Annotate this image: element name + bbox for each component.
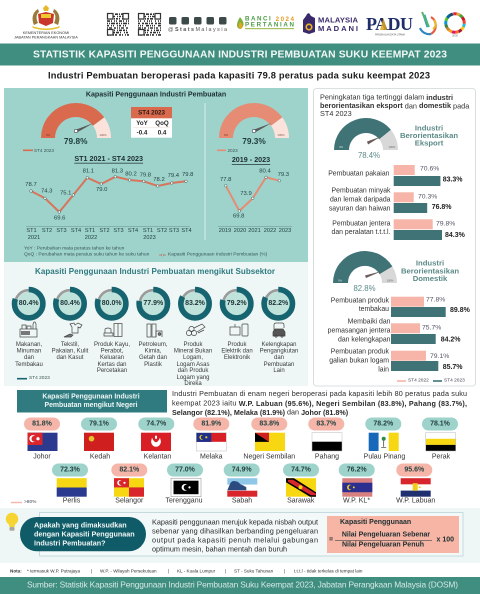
logo: Jabatan Perangkaan Malaysia coat of arms bbox=[14, 5, 78, 40]
footnotes: * termasuk W.P. Putrajaya bbox=[27, 568, 80, 574]
line chart: quarterly capacity utilisation: 74.3 bbox=[41, 189, 53, 195]
line chart: quarterly capacity utilisation: ST4 bbox=[71, 228, 81, 234]
legend: ST4 2022 and ST4 2023 bbox=[397, 378, 465, 384]
line chart: quarterly capacity utilisation: ST4 bbox=[128, 228, 138, 234]
notes and line legend: YoY : Perubahan mata peratus tahun ke tahun bbox=[24, 246, 125, 252]
flag: Perlis bbox=[57, 478, 87, 497]
gauge: ST4 2023 79.8%: 79.8% bbox=[64, 136, 88, 146]
intro text bbox=[320, 92, 470, 118]
bar chart: export oriented: 70.6% bbox=[420, 166, 439, 172]
question pill: Apakah yang dimaksudkan bbox=[34, 520, 127, 530]
state names: row two: Terengganu bbox=[166, 498, 203, 504]
subsector labels: Petroleum, bbox=[138, 342, 168, 348]
text: definition: optimum mesin, bahan mentah dan buruh bbox=[152, 544, 287, 554]
footnotes: KL - Kuala Lumpur bbox=[177, 568, 216, 574]
line chart: quarterly capacity utilisation: ST3 bbox=[113, 228, 124, 234]
line chart: annual capacity utilisation: 80.4 bbox=[259, 169, 271, 175]
footnotes: W.P. - Wilayah Persekutuan bbox=[100, 568, 157, 574]
formula box: Nilai Pengeluaran Penuh bbox=[342, 542, 424, 548]
subsector labels: Perabot, bbox=[101, 349, 124, 355]
state pills: row one: 83.8% bbox=[259, 420, 280, 428]
subsector labels: Pengangkutan bbox=[260, 349, 298, 355]
social media handle bbox=[168, 17, 227, 33]
flag: Kedah bbox=[84, 433, 114, 451]
table: YoY and QoQ: YoY bbox=[136, 120, 149, 127]
heading: export oriented industry: Berorientasikan bbox=[400, 131, 458, 140]
line chart: quarterly capacity utilisation: ST3 bbox=[56, 228, 67, 234]
text: definition bbox=[152, 518, 318, 554]
bar chart: domestic oriented: 84.2% bbox=[441, 336, 461, 344]
gauge: domestic 82.8%: 82.8% bbox=[353, 284, 376, 293]
subsector labels: Kelengkapan bbox=[261, 342, 297, 348]
state names: row one: Kedah bbox=[90, 454, 110, 460]
footnotes: ST - Suku Tahunan bbox=[234, 568, 274, 574]
icon: metal pipes bbox=[186, 324, 205, 336]
bar chart: domestic oriented: 77.8% bbox=[426, 296, 445, 304]
flag: W.P. Labuan bbox=[401, 478, 431, 497]
chart heading: quarterly: ST1 2021 - ST4 2023 bbox=[74, 154, 143, 163]
heading: export oriented industry bbox=[400, 124, 458, 148]
subsector labels: Tekstil, bbox=[61, 342, 79, 348]
footnotes: | bbox=[225, 568, 226, 574]
heading: export oriented industry: Industri bbox=[415, 124, 443, 132]
state pills: row one: 74.7% bbox=[146, 420, 167, 428]
line chart: quarterly capacity utilisation: ST2 bbox=[42, 228, 52, 234]
heading: capacity utilisation by state: Pembuatan mengikut Negeri bbox=[44, 402, 138, 409]
line chart: quarterly capacity utilisation: 78.2 bbox=[153, 177, 165, 183]
subsector labels: Percetakan bbox=[97, 368, 127, 374]
line chart: annual capacity utilisation bbox=[218, 169, 292, 234]
line chart: quarterly capacity utilisation: 80.2 bbox=[125, 171, 137, 177]
state pills: row two: 74.9% bbox=[232, 466, 252, 474]
state names: row two: Selangor bbox=[115, 498, 144, 504]
QR code 1 bbox=[107, 14, 129, 35]
line chart: quarterly capacity utilisation: 75.1 bbox=[60, 190, 71, 196]
table: YoY and QoQ: -0.4 bbox=[137, 130, 148, 136]
text: state summary: Selangor (82.1%), Melaka (81.9%) dan Johor (81.8%) bbox=[172, 408, 349, 416]
notes and line legend: Kapasiti Penggunaan Industri Pembuatan (%) bbox=[168, 252, 268, 258]
footnotes: Nota: bbox=[10, 568, 22, 574]
footnotes: | bbox=[168, 568, 169, 574]
subsector labels: dan bbox=[24, 355, 34, 361]
heading: capacity utilisation by state bbox=[17, 390, 167, 412]
social media handle: @ Stats Malaysia bbox=[168, 27, 227, 33]
flag: Sabah bbox=[227, 478, 257, 497]
legend: ST4 2023: ST4 2023 bbox=[29, 375, 50, 381]
bar chart: domestic oriented: dan kelengkapan bbox=[338, 336, 391, 344]
heading: capacity utilisation by state: Kapasiti Penggunaan Industri bbox=[42, 394, 140, 400]
donuts: subsector percentages: 80.0% bbox=[102, 300, 122, 307]
line chart: quarterly capacity utilisation: 2021 bbox=[28, 235, 40, 241]
panel: capacity utilisation by subsector bbox=[4, 262, 308, 387]
flag: Terengganu bbox=[171, 478, 201, 497]
subsector labels bbox=[15, 342, 298, 387]
intro text: Peningkatan tiga tertinggi dalam industri bbox=[320, 92, 453, 102]
bar chart: export oriented: Pembuatan pakaian bbox=[328, 170, 390, 178]
donuts: subsector percentages: 80.4% bbox=[19, 300, 39, 307]
state names: row one: Perak bbox=[432, 454, 451, 460]
legend: 2023: 2023 bbox=[228, 148, 238, 153]
bar chart: export oriented: dan peralatan t.t.t.l. bbox=[332, 229, 391, 236]
subsector labels: Elektrik dan bbox=[221, 349, 253, 355]
flag: Kelantan bbox=[141, 433, 171, 451]
logo: Banci 2024 Pertanian bbox=[237, 15, 295, 29]
logo: colourful V mark bbox=[420, 12, 436, 34]
line chart: quarterly capacity utilisation: ST3 bbox=[169, 228, 179, 234]
logo: PADU: PADU bbox=[366, 14, 413, 34]
flag: Negeri Sembilan bbox=[255, 433, 285, 451]
bar chart: domestic oriented: Membaiki dan bbox=[348, 318, 391, 326]
gauge: export 78.4%: 78.4% bbox=[358, 151, 380, 160]
intro text: berorientasikan eksport dan domestik pada bbox=[320, 101, 470, 110]
donuts: subsector percentages bbox=[14, 290, 292, 318]
gauge: domestic 82.8%: 100% bbox=[387, 278, 394, 282]
subtitle: Industri Pembuatan beroperasi pada kapasiti 79.8 peratus pada suku keempat 2023 bbox=[48, 70, 430, 80]
bar chart: export oriented: Pembuatan jentera bbox=[332, 220, 391, 228]
panel: manufacturing capacity utilisation bbox=[4, 88, 308, 262]
notes and line legend bbox=[24, 246, 268, 258]
state names: row two: W.P. KL* bbox=[343, 498, 370, 504]
text: state summary bbox=[172, 389, 467, 416]
state names: row two: W.P. Labuan bbox=[396, 498, 435, 504]
subsector labels: Pakaian, Kulit bbox=[52, 349, 89, 355]
question pill bbox=[20, 517, 146, 551]
logo: Malaysia Madani bbox=[303, 13, 359, 34]
bar chart: export oriented bbox=[328, 165, 466, 240]
line chart: annual capacity utilisation: 79.3 bbox=[278, 172, 290, 178]
subsector labels: Getah dan bbox=[139, 355, 167, 361]
state names: row two: Sabah bbox=[232, 498, 252, 504]
state pills: row one: 83.7% bbox=[316, 420, 337, 428]
subsector labels: Lain bbox=[273, 368, 285, 374]
gauge: export 78.4%: 100% bbox=[389, 145, 396, 149]
icon: electronics bbox=[230, 324, 248, 336]
source band: Sumber: Statistik Kapasiti Penggunaan Industri Pembuatan Suku Keempat 2023, Jabatan Perangkaan Malaysia (DOSM) bbox=[27, 580, 458, 590]
line chart: annual capacity utilisation: 73.9 bbox=[240, 191, 252, 197]
line chart: quarterly capacity utilisation: ST4 bbox=[181, 228, 192, 234]
text: state summary: Industri Pembuatan di enam negeri beroperasi pada kapasiti lebih 80 peratus pada suku bbox=[172, 389, 467, 398]
logo: SDG wheel bbox=[444, 12, 466, 38]
formula box: = bbox=[329, 536, 333, 544]
state pills: row one: 81.9% bbox=[201, 420, 222, 428]
text: state summary: keempat 2023 iaitu W.P. Labuan (95.6%), Negeri Sembilan (83.8%), Pahang (83.7%), bbox=[172, 398, 467, 407]
footnotes bbox=[10, 568, 363, 574]
legend: 2023 bbox=[217, 148, 238, 153]
state pills: row two: 76.2% bbox=[347, 466, 367, 474]
formula box: Kapasiti Penggunaan bbox=[340, 519, 411, 526]
subsector labels: dan bbox=[274, 355, 284, 361]
donuts: subsector percentages: 79.2% bbox=[227, 300, 247, 307]
line chart: annual capacity utilisation: 77.8 bbox=[220, 177, 232, 183]
subsector labels: Tembakau bbox=[15, 362, 43, 368]
text: definition: sebenar yang dihasilkan berbanding pengeluaran bbox=[152, 526, 318, 536]
bar chart: domestic oriented: 89.8% bbox=[450, 307, 471, 314]
table: YoY and QoQ: QoQ bbox=[155, 120, 169, 127]
state names: row one: Melaka bbox=[200, 454, 223, 460]
state names: row one: Kelantan bbox=[144, 454, 171, 460]
state pills: row two: 77.0% bbox=[175, 466, 196, 474]
legend: ST4 2022 and ST4 2023: ST4 2022 bbox=[408, 378, 429, 384]
gauge: 2023 79.3%: 0% bbox=[224, 133, 229, 137]
text: definition: Kapasiti penggunaan merujuk kepada nisbah output bbox=[152, 518, 318, 526]
line chart: quarterly capacity utilisation: 69.6 bbox=[54, 216, 66, 222]
panel: export and domestic oriented industries bbox=[314, 88, 476, 386]
line chart: annual capacity utilisation: 69.8 bbox=[233, 214, 245, 220]
donuts: subsector percentages: 77.9% bbox=[143, 300, 164, 307]
gauge: 2023 79.3% bbox=[219, 103, 289, 146]
subsector labels: Mineral Bukan bbox=[174, 349, 212, 355]
line chart: quarterly capacity utilisation: 81.3 bbox=[112, 169, 124, 175]
state names: row two bbox=[63, 498, 435, 504]
legend: ST4 2023 bbox=[17, 375, 50, 381]
logo: Jabatan Perangkaan Malaysia coat of arms: JABATAN PERANGKAAN MALAYSIA bbox=[14, 36, 78, 40]
state pills: row one: 79.1% bbox=[89, 420, 110, 428]
state names: row two: Perlis bbox=[63, 498, 81, 504]
flag: Johor bbox=[28, 433, 58, 451]
logo: Banci 2024 Pertanian: BANCI 2024 bbox=[245, 15, 295, 22]
flag: Selangor bbox=[114, 478, 144, 497]
state pills: row two: 72.3% bbox=[60, 466, 81, 474]
footnotes: | bbox=[284, 568, 285, 574]
bar chart: export oriented: sayuran dan haiwan bbox=[329, 206, 391, 212]
flag: Melaka bbox=[196, 433, 226, 451]
gauge: ST4 2023 79.8% bbox=[41, 103, 111, 146]
QR code 2 bbox=[138, 14, 161, 35]
state pills: row one: 78.1% bbox=[430, 420, 451, 428]
subsector labels: Kimia, bbox=[145, 349, 162, 355]
subsector labels: dan Kasut bbox=[56, 355, 84, 361]
bar chart: domestic oriented: galian bukan logam bbox=[329, 358, 389, 364]
footnotes: | bbox=[91, 568, 92, 574]
flag: Sarawak bbox=[286, 478, 316, 497]
bar chart: export oriented: 84.3% bbox=[445, 232, 466, 239]
table: YoY and QoQ bbox=[131, 107, 172, 138]
line chart: annual capacity utilisation: 2021 bbox=[248, 228, 261, 234]
logo: Malaysia Madani: MALAYSIA bbox=[318, 16, 359, 24]
flag: Perak bbox=[426, 433, 456, 451]
legend: ST4 2022 and ST4 2023: ST4 2023 bbox=[444, 378, 465, 384]
subsector labels: Produk Kayu, bbox=[94, 342, 130, 348]
subsector labels: Elektronik bbox=[224, 355, 251, 361]
subsector labels: Keluaran bbox=[100, 355, 124, 361]
gauge: 2023 79.3%: 79.3% bbox=[242, 136, 266, 146]
donuts: subsector percentages: 80.4% bbox=[60, 300, 81, 307]
title band bbox=[0, 44, 480, 66]
state pills: row two: 82.1% bbox=[119, 466, 140, 474]
gauge: 2023 79.3%: 100% bbox=[277, 133, 285, 137]
bar chart: domestic oriented: tembakau bbox=[359, 306, 389, 313]
bar chart: export oriented: 76.8% bbox=[432, 204, 452, 211]
text: definition: output pada kapasiti penuh melalui gabungan bbox=[152, 536, 318, 544]
subsector labels: dan Produk bbox=[178, 368, 209, 374]
subsector labels: Pembuatan bbox=[264, 362, 294, 368]
gauge: ST4 2023 79.8%: 0% bbox=[46, 133, 51, 137]
bar chart: domestic oriented: Pembuatan produk bbox=[331, 348, 390, 356]
subsector heading: Kapasiti Penggunaan Industri Pembuatan mengikut Subsektor bbox=[35, 267, 275, 276]
state pills: row one bbox=[24, 418, 458, 430]
icon: food and drink bbox=[20, 322, 37, 337]
footnotes: t.t.t.l - tidak terkelas di tempat lain bbox=[294, 568, 363, 574]
flag: Pahang bbox=[312, 433, 342, 451]
state names: row one: Pulau Pinang bbox=[364, 454, 405, 460]
line chart: quarterly capacity utilisation: 2022 bbox=[85, 235, 97, 241]
line chart: quarterly capacity utilisation: ST2 bbox=[99, 228, 110, 234]
gauge: domestic 82.8%: 0% bbox=[338, 278, 343, 282]
logo: Banci 2024 Pertanian: PERTANIAN bbox=[245, 21, 295, 28]
state pills: row two: 74.7% bbox=[291, 466, 312, 474]
state pills: row one: 81.8% bbox=[32, 420, 53, 428]
donuts: subsector percentages: 82.2% bbox=[268, 300, 289, 307]
line chart: annual capacity utilisation: 2020 bbox=[234, 228, 246, 234]
subsector labels: Makanan, bbox=[16, 342, 43, 348]
heading: export oriented industry: Eksport bbox=[415, 138, 444, 148]
legend: ST4 2023 bbox=[23, 148, 54, 153]
chart heading: annual: 2019 - 2023 bbox=[232, 155, 270, 164]
legend: above 80 percent bbox=[11, 499, 37, 505]
logo: SDG wheel: 2030 bbox=[452, 34, 458, 38]
donuts: subsector percentages: 83.2% bbox=[185, 300, 206, 307]
bar chart: domestic oriented: 75.7% bbox=[422, 324, 441, 332]
line chart: quarterly capacity utilisation: 79.8 bbox=[140, 173, 152, 179]
notes and line legend: QoQ : Perubahan mata peratus suku tahun ke suku tahun bbox=[24, 252, 150, 258]
subsector labels: Produk bbox=[227, 342, 248, 348]
gauge: ST4 2023 79.8%: 100% bbox=[99, 133, 107, 137]
heading: domestic oriented industry: Domestik bbox=[413, 274, 448, 283]
table: YoY and QoQ: ST4 2023 bbox=[138, 109, 165, 116]
state names: row one: Johor bbox=[33, 454, 51, 460]
bar chart: export oriented: Pembuatan minyak bbox=[332, 188, 391, 194]
line chart: quarterly capacity utilisation: 78.7 bbox=[25, 182, 37, 188]
state names: row one bbox=[33, 454, 451, 460]
bar chart: export oriented: 70.3% bbox=[418, 194, 437, 200]
line chart: quarterly capacity utilisation: 79.0 bbox=[96, 187, 108, 193]
icon: vehicle bbox=[273, 323, 285, 337]
formula box: Nilai Pengeluaran Sebenar bbox=[342, 532, 430, 538]
gauge: export 78.4%: 0% bbox=[339, 145, 344, 149]
heading: domestic oriented industry: Industri bbox=[416, 258, 444, 268]
line chart: quarterly capacity utilisation bbox=[25, 169, 194, 241]
legend: above 80 percent: >80% bbox=[24, 499, 37, 505]
subsector labels: Kertas dan bbox=[97, 362, 127, 368]
state pills: row one: 78.2% bbox=[373, 420, 394, 428]
logo: Malaysia Madani: MADANI bbox=[318, 24, 358, 33]
intro text: ST4 2023 bbox=[320, 109, 352, 118]
state names: row two: Sarawak bbox=[287, 498, 315, 504]
line chart: quarterly capacity utilisation: 79.4 bbox=[168, 173, 180, 179]
legend: ST4 2023: ST4 2023 bbox=[34, 148, 54, 153]
line chart: quarterly capacity utilisation: 2023 bbox=[143, 235, 156, 241]
heading: domestic oriented industry: Berorientasikan bbox=[401, 266, 459, 275]
logo: Jabatan Perangkaan Malaysia coat of arms: KEMENTERIAN EKONOMI bbox=[23, 31, 69, 35]
flag: W.P. Kuala Lumpur bbox=[342, 478, 372, 497]
question pill: Industri Pembuatan? bbox=[34, 538, 105, 548]
heading: domestic oriented industry bbox=[401, 258, 459, 283]
bar chart: domestic oriented bbox=[328, 296, 471, 374]
subsector labels: Logam Asas bbox=[176, 362, 210, 368]
icon: light bulb bbox=[6, 513, 18, 531]
state pills: row two: 95.6% bbox=[404, 466, 425, 474]
subsector labels: Plastik bbox=[144, 362, 163, 368]
question pill: dengan Kapasiti Penggunaan bbox=[34, 530, 135, 538]
table: YoY and QoQ: 0.4 bbox=[158, 130, 167, 136]
logo: PADU: PANGKALAN DATA UTAMA bbox=[375, 34, 405, 36]
icon: furniture bbox=[104, 324, 122, 336]
line chart: annual capacity utilisation: 2023 bbox=[279, 228, 291, 234]
title band: STATISTIK KAPASITI PENGGUNAAN INDUSTRI PEMBUATAN SUKU KEEMPAT 2023 bbox=[33, 50, 447, 60]
formula box bbox=[327, 516, 459, 553]
subsector labels: Logam, bbox=[183, 355, 203, 361]
icon: t-shirt and shoe bbox=[64, 323, 82, 337]
state names: row one: Negeri Sembilan bbox=[243, 454, 295, 460]
source band bbox=[0, 577, 480, 594]
panel heading: Kapasiti Penggunaan Industri Pembuatan bbox=[86, 90, 226, 98]
bar chart: export oriented: dan lemak daripada bbox=[330, 196, 391, 204]
bar chart: domestic oriented: lain bbox=[378, 366, 389, 374]
line chart: annual capacity utilisation: 2022 bbox=[264, 228, 276, 234]
panel: definition bbox=[0, 508, 480, 563]
bar chart: export oriented: 79.8% bbox=[436, 220, 455, 228]
line chart: quarterly capacity utilisation: ST2 bbox=[157, 228, 167, 234]
bar chart: domestic oriented: 85.7% bbox=[443, 364, 463, 371]
line chart: quarterly capacity utilisation: ST1 bbox=[143, 228, 153, 234]
bar chart: domestic oriented: pemasangan jentera bbox=[328, 328, 391, 334]
state pills: row two bbox=[52, 464, 432, 476]
flag: Pulau Pinang bbox=[369, 433, 399, 451]
bar chart: domestic oriented: Pembuatan produk bbox=[331, 298, 390, 304]
subsector labels: Produk bbox=[183, 342, 204, 348]
gauge: domestic 82.8% bbox=[333, 251, 397, 293]
state names: row one: Pahang bbox=[315, 454, 339, 460]
icon: petrochemical plant bbox=[147, 324, 162, 337]
gauge: export 78.4% bbox=[334, 118, 398, 160]
line chart: annual capacity utilisation: 2019 bbox=[219, 228, 231, 234]
line chart: quarterly capacity utilisation: ST1 bbox=[26, 228, 37, 234]
bar chart: export oriented: 83.3% bbox=[443, 176, 463, 184]
line chart: quarterly capacity utilisation: 81.1 bbox=[83, 169, 94, 175]
line chart: quarterly capacity utilisation: ST1 bbox=[85, 228, 95, 234]
subsector labels: Minuman bbox=[17, 349, 41, 355]
subsector labels: Logam yang bbox=[176, 375, 210, 381]
subsector labels: Direka bbox=[184, 381, 202, 387]
line chart: quarterly capacity utilisation: 79.8 bbox=[182, 172, 194, 178]
formula box: x 100 bbox=[436, 536, 454, 544]
bar chart: domestic oriented: 79.1% bbox=[430, 353, 449, 360]
